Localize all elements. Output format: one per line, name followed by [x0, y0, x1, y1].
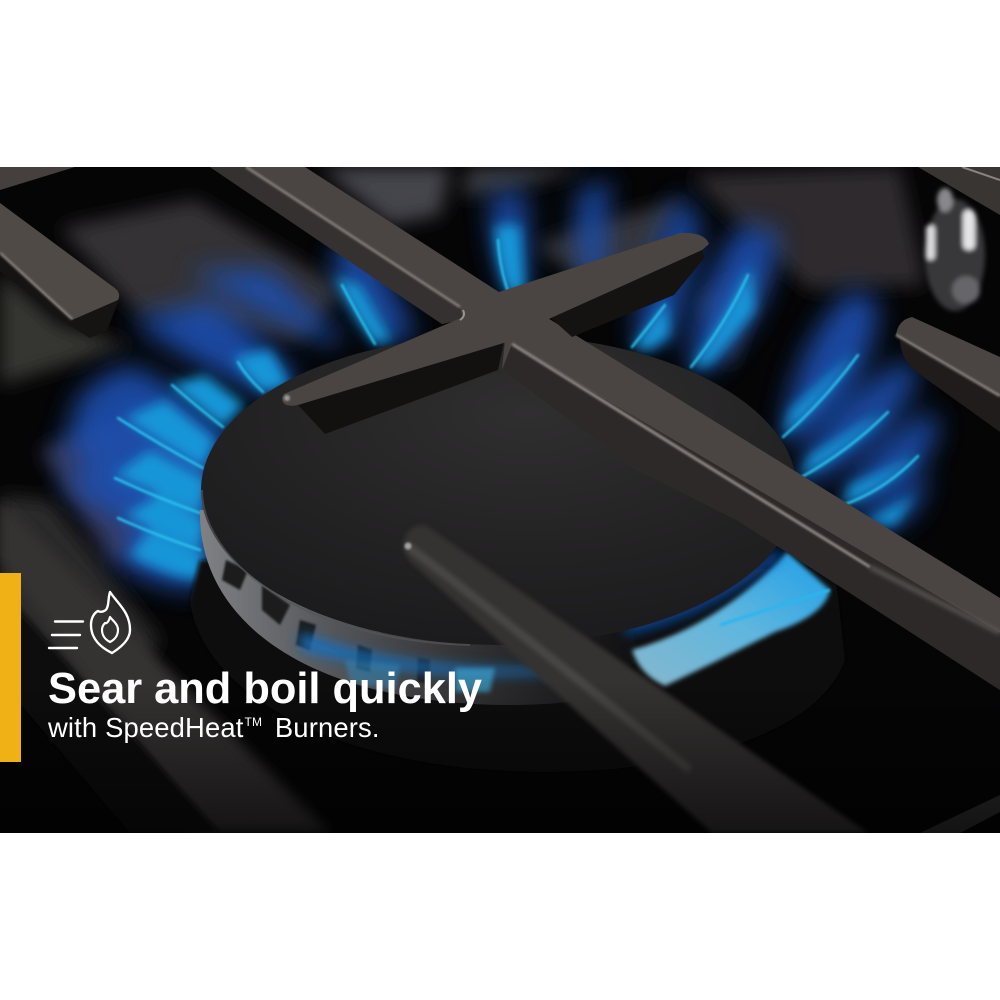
heading: Sear and boil quickly — [48, 665, 482, 713]
caption shade — [130, 710, 1000, 833]
burner ports — [222, 560, 430, 684]
background — [0, 167, 1000, 833]
yellow accent bar — [0, 573, 21, 762]
grate: top-right bar — [918, 167, 1000, 215]
flames: soft outer body — [55, 180, 938, 590]
burner base — [189, 556, 228, 618]
grate: right bar — [896, 317, 1000, 432]
flames: bright body — [115, 225, 920, 580]
lower-left bars — [0, 500, 330, 833]
grate: left cross arm — [282, 310, 505, 434]
grate: lower bar — [404, 525, 868, 833]
chrome knob — [925, 188, 985, 311]
flames: sharp cyan edges — [115, 240, 918, 550]
icon: speed lines and flame — [48, 590, 132, 654]
burner ring — [200, 500, 640, 705]
grate: right cross arm — [490, 233, 709, 337]
grate: upper-left bar — [0, 203, 120, 338]
product photo: gas burner with blue flames — [0, 167, 1000, 833]
burner cap — [201, 335, 797, 645]
blurred cooktop surfaces — [0, 167, 925, 720]
lower flames — [300, 632, 568, 675]
grate: top-left bar — [0, 167, 75, 190]
grate: main diagonal bar — [210, 167, 1000, 690]
subheading: with SpeedHeatTM Burners. — [48, 712, 380, 743]
